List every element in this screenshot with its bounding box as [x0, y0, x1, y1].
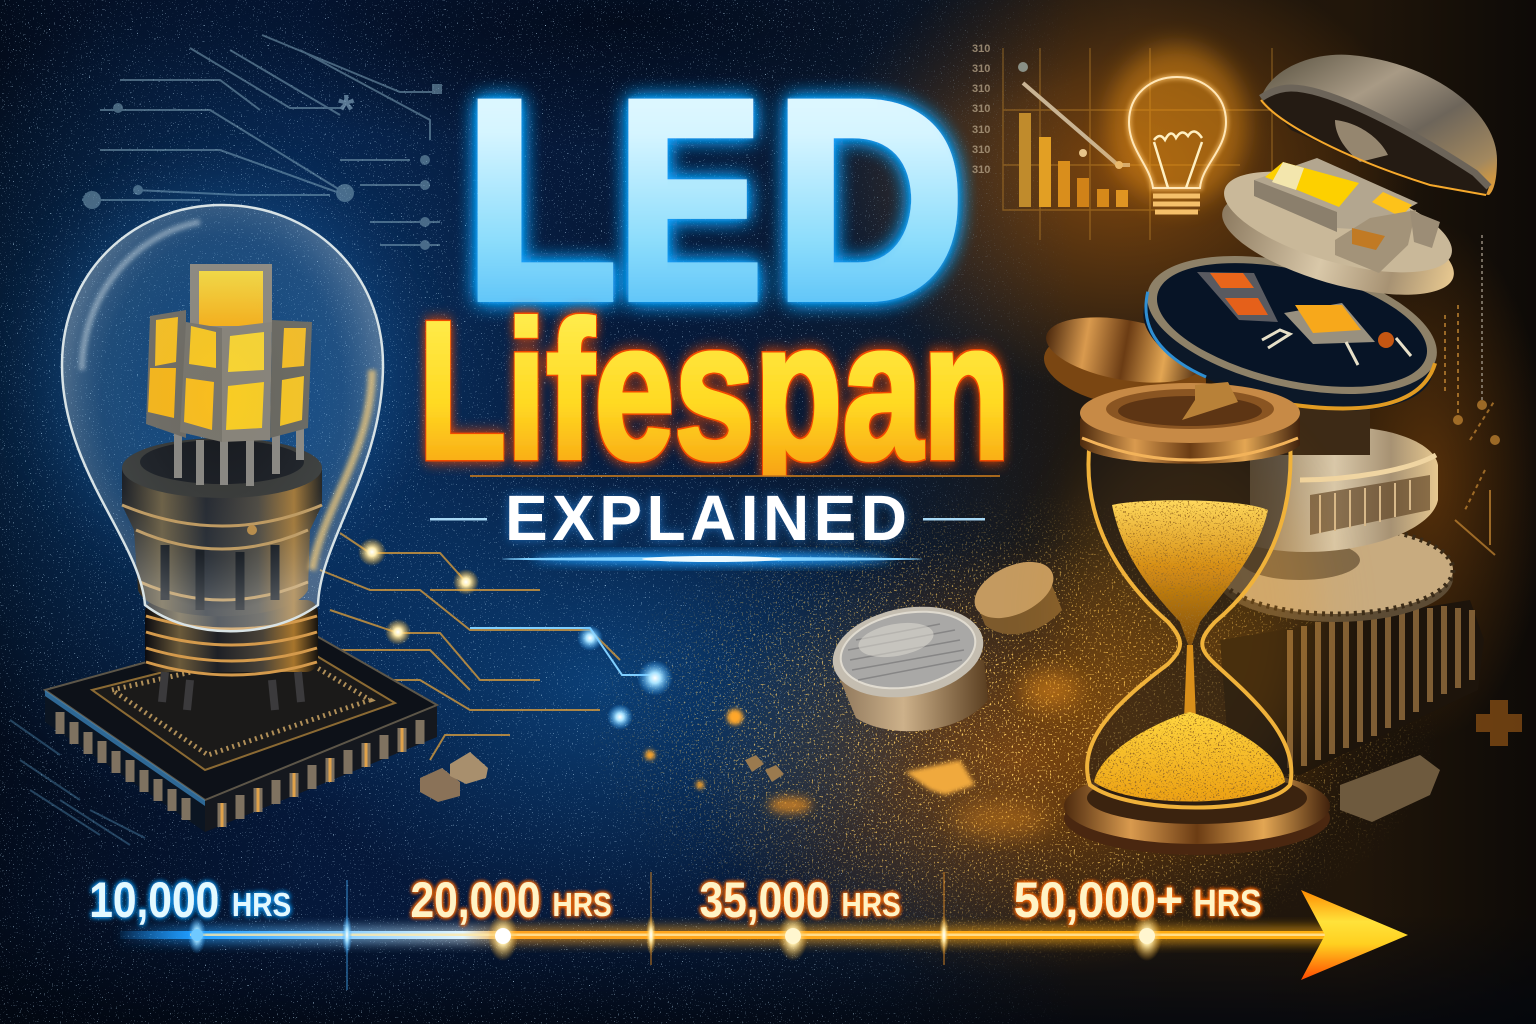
black disc [1130, 231, 1450, 435]
tick orange B [943, 872, 945, 965]
circuit traces top left: * [338, 86, 355, 133]
sparkle blue [342, 915, 352, 955]
chips on disc [1197, 272, 1411, 365]
label 20,000 HRS: 20,000 [411, 872, 541, 928]
glass dome [1261, 55, 1497, 195]
icon: small solder chips left [420, 752, 488, 802]
icon: cream stacked ring [1250, 427, 1438, 552]
tick orange A [650, 872, 652, 965]
icon: small chips center [745, 755, 784, 782]
icon: hourglass [1060, 382, 1330, 855]
chart axis labels: 310 [972, 144, 990, 156]
hourglass base [1064, 768, 1330, 855]
chart axis labels: 310 [972, 164, 990, 176]
node 10,000 [188, 916, 206, 954]
label 50,000+ HRS: 50,000+ [1014, 872, 1183, 928]
sand bottom [1094, 712, 1285, 802]
icon: LED chip base [45, 622, 437, 832]
timeline line [120, 926, 1345, 944]
timeline arrow [1301, 890, 1408, 980]
label 20,000 HRS [411, 872, 612, 928]
icon: LED light bulb [47, 185, 397, 710]
label 35,000 HRS: HRS [842, 887, 901, 924]
bulb glow [47, 185, 397, 555]
title: LED [465, 40, 965, 359]
label 10,000 HRS: HRS [232, 887, 291, 924]
label 10,000 HRS [89, 872, 291, 928]
title: LED: D [774, 42, 965, 359]
icon: glowing background bulb [1107, 45, 1247, 212]
chart axis labels [972, 43, 990, 176]
chart axis labels: 310 [972, 124, 990, 136]
label 50,000+ HRS: HRS [1193, 883, 1262, 925]
LED panels [146, 264, 312, 442]
icon: gold slug [966, 550, 1062, 634]
chart axis labels: 310 [972, 63, 990, 75]
small circuit traces lower left [10, 720, 145, 845]
label 20,000 HRS: HRS [553, 887, 612, 924]
title: LED: E [618, 42, 762, 359]
chart trend line [1018, 62, 1130, 169]
label 50,000+ HRS [1014, 872, 1262, 928]
chart axis labels: 310 [972, 83, 990, 95]
circuit traces top left [82, 35, 442, 250]
faint right circuit [1445, 235, 1499, 555]
icon: heat sink [1220, 600, 1484, 822]
metal collar [122, 438, 322, 616]
circuit traces from bulb [320, 533, 673, 760]
timeline [89, 872, 1408, 990]
tick blue [346, 880, 348, 990]
sand top [1112, 500, 1268, 650]
chart grid [1003, 48, 1272, 240]
subtitle: EXPLAINED [430, 482, 985, 565]
central column [1275, 385, 1370, 455]
icon: LED module disc exploded [1130, 55, 1497, 455]
faded chart behind small bulb [972, 43, 1272, 240]
icon: gear disc [1217, 526, 1453, 622]
title: Lifespan: Lifespan [418, 281, 1011, 500]
chart axis labels: 310 [972, 43, 990, 55]
cream plate [1212, 151, 1464, 316]
bright gold cluster [645, 672, 1080, 834]
label 10,000 HRS: 10,000 [89, 872, 219, 928]
glass body [1087, 440, 1291, 808]
icon: bronze ring [1038, 307, 1212, 420]
faint right icon pattern [1476, 700, 1522, 746]
title: LED: L [465, 40, 617, 359]
icon: silver lens [826, 595, 990, 731]
falling sand [1184, 645, 1196, 720]
LED module legs [178, 420, 300, 486]
label 35,000 HRS [700, 872, 901, 928]
chart axis labels: 310 [972, 103, 990, 115]
node 35,000 [778, 913, 808, 961]
divider orange [470, 475, 1000, 477]
sparkle B [939, 915, 949, 955]
hourglass cap [1080, 382, 1300, 464]
sparkle A [646, 915, 656, 955]
node 20,000 [488, 913, 518, 961]
screw base [145, 600, 318, 710]
chart bars [1019, 113, 1128, 207]
label 35,000 HRS: 35,000 [700, 872, 830, 928]
node 50,000+ [1132, 913, 1162, 961]
subtitle: EXPLAINED: EXPLAINED [505, 482, 907, 554]
glass envelope [62, 205, 383, 631]
